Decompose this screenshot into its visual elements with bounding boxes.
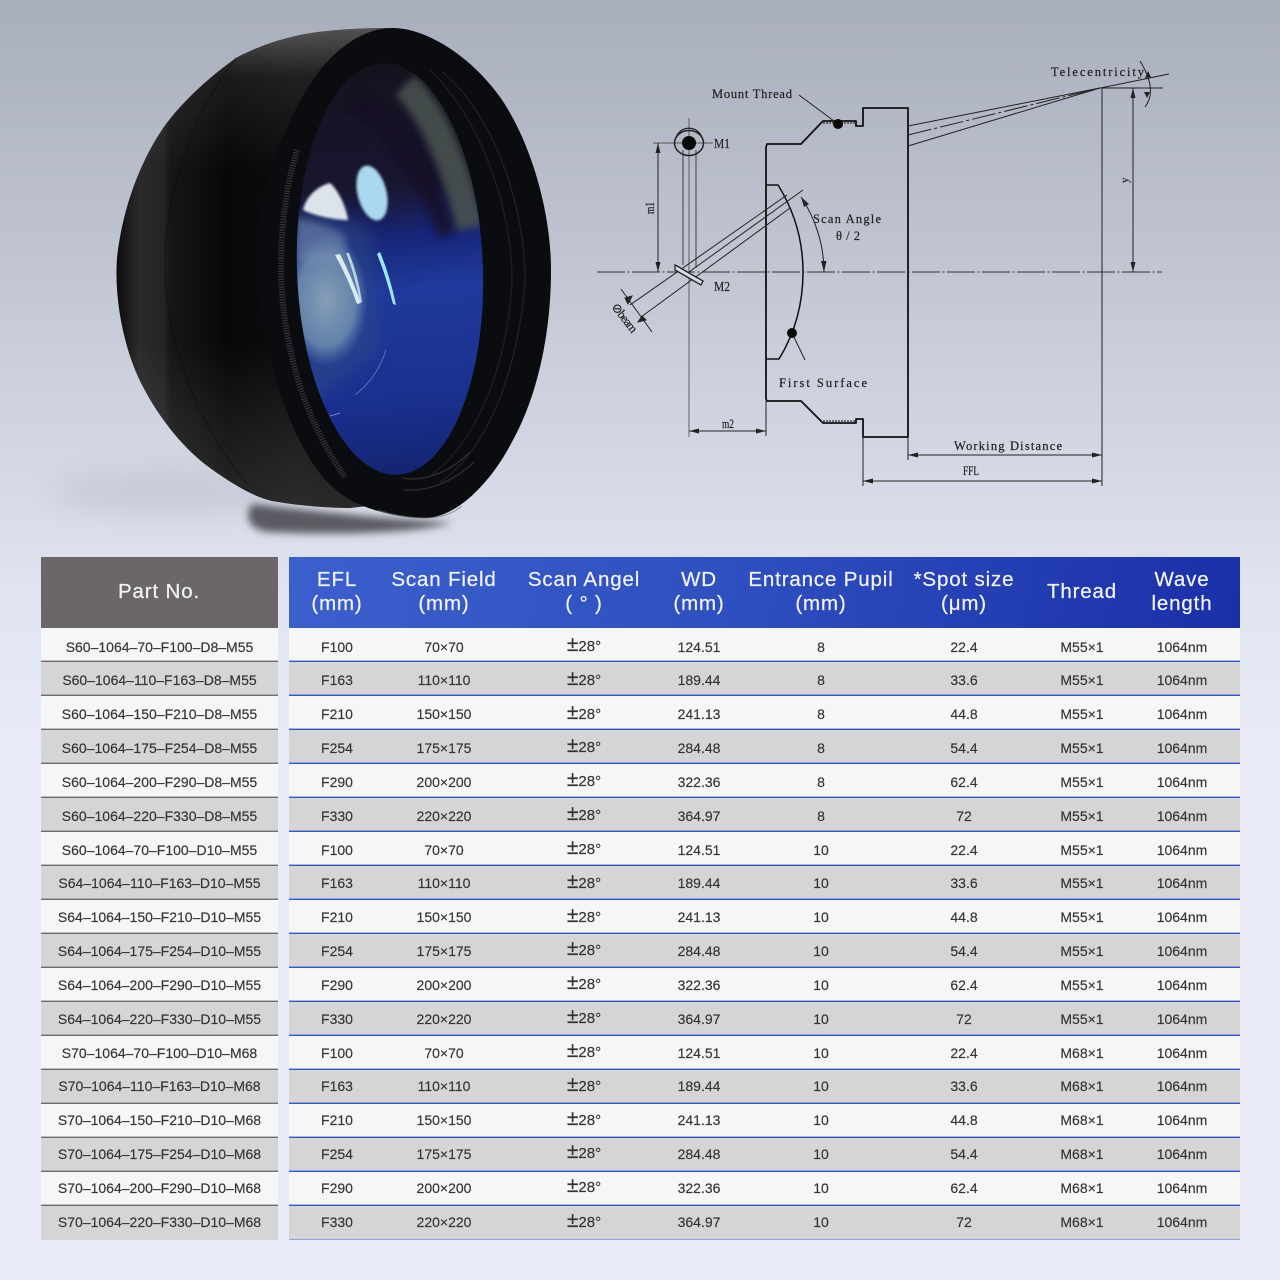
- specifications table: 1064nm: [1157, 1180, 1207, 1196]
- part number column: S60–1064–220–F330–D8–M55: [62, 808, 257, 824]
- glass reflections: [303, 162, 396, 416]
- specifications table: 72: [956, 1214, 972, 1230]
- specifications table: 322.36: [678, 1180, 720, 1196]
- specifications table: 62.4: [950, 1180, 978, 1196]
- specifications table: 189.44: [678, 672, 720, 688]
- diagram labels: m1: [642, 202, 657, 214]
- specifications table: 124.51: [678, 1045, 720, 1061]
- table header: specifications: (mm): [418, 592, 470, 615]
- specifications table: 284.48: [678, 1146, 720, 1162]
- part number column: S70–1064–70–F100–D10–M68: [62, 1045, 257, 1061]
- specifications table: F210: [321, 706, 353, 722]
- specifications table: ±28°: [567, 633, 601, 656]
- specifications table: 220×220: [417, 1214, 471, 1230]
- specifications table: 150×150: [417, 1112, 471, 1128]
- specifications table: 10: [813, 977, 829, 993]
- first surface curve: [766, 185, 803, 359]
- specifications table: M68×1: [1060, 1078, 1104, 1094]
- specifications table: 22.4: [950, 842, 978, 858]
- specifications table: ±28°: [567, 1140, 601, 1163]
- specifications table: 1064nm: [1157, 639, 1207, 655]
- specifications table: 241.13: [678, 1112, 720, 1128]
- specifications table: 10: [813, 1146, 829, 1162]
- specifications table: M55×1: [1060, 774, 1104, 790]
- scan angle arc: [801, 197, 824, 272]
- specifications table: 124.51: [678, 639, 720, 655]
- specifications table: 1064nm: [1157, 706, 1207, 722]
- specifications table: F290: [321, 977, 353, 993]
- lens shadow: [50, 470, 452, 534]
- specifications table: 1064nm: [1157, 909, 1207, 925]
- specifications table: 8: [817, 808, 825, 824]
- specifications table: F290: [321, 774, 353, 790]
- specifications table: 33.6: [950, 875, 978, 891]
- specifications table: ±28°: [567, 1005, 601, 1028]
- specifications table: M55×1: [1060, 672, 1104, 688]
- table header: specifications: Scan Field: [391, 568, 497, 591]
- front retaining ring: [255, 28, 551, 518]
- specifications table: 33.6: [950, 1078, 978, 1094]
- specifications table: 364.97: [678, 808, 720, 824]
- specifications table: 220×220: [417, 1011, 471, 1027]
- specifications table: 189.44: [678, 875, 720, 891]
- specifications table: 1064nm: [1157, 875, 1207, 891]
- specifications table: 364.97: [678, 1214, 720, 1230]
- specifications table: ±28°: [567, 1039, 601, 1062]
- diagram labels: FFL: [963, 463, 979, 478]
- specifications table: F330: [321, 1214, 353, 1230]
- specifications table: ±28°: [567, 937, 601, 960]
- specifications table: 8: [817, 740, 825, 756]
- specifications table: 72: [956, 808, 972, 824]
- specifications table: 10: [813, 1011, 829, 1027]
- specifications table: 70×70: [424, 1045, 464, 1061]
- specifications table: 322.36: [678, 774, 720, 790]
- part number column: S60–1064–70–F100–D8–M55: [66, 639, 253, 655]
- specifications table: 322.36: [678, 977, 720, 993]
- specifications table: 10: [813, 842, 829, 858]
- table header: specifications: WD: [681, 568, 717, 591]
- specifications table: 22.4: [950, 1045, 978, 1061]
- specifications table: 284.48: [678, 943, 720, 959]
- specifications table: F100: [321, 639, 353, 655]
- specifications table: 175×175: [417, 943, 471, 959]
- specifications table: 110×110: [418, 875, 470, 891]
- lens body: [116, 28, 392, 508]
- specifications table: [289, 628, 1240, 1240]
- table header: part number: Part No.: [118, 580, 200, 603]
- part number column: S64–1064–175–F254–D10–M55: [58, 943, 261, 959]
- part number column: S70–1064–150–F210–D10–M68: [58, 1112, 261, 1128]
- specifications table: M68×1: [1060, 1112, 1104, 1128]
- specifications table: 8: [817, 672, 825, 688]
- specifications table: 220×220: [417, 808, 471, 824]
- specifications table: 150×150: [417, 706, 471, 722]
- table header: specifications: EFL: [317, 568, 357, 591]
- specifications table: M68×1: [1060, 1180, 1104, 1196]
- specifications table: M55×1: [1060, 639, 1104, 655]
- specifications table: 110×110: [418, 1078, 470, 1094]
- specifications table: F210: [321, 1112, 353, 1128]
- specifications table: F330: [321, 808, 353, 824]
- specifications table: 1064nm: [1157, 774, 1207, 790]
- specifications table: 175×175: [417, 1146, 471, 1162]
- specifications table: 54.4: [950, 1146, 978, 1162]
- blue coated glass: [296, 63, 484, 475]
- specifications table: F163: [321, 672, 353, 688]
- diagram labels: [609, 65, 1145, 478]
- part number column: S60–1064–70–F100–D10–M55: [62, 842, 257, 858]
- part number column: S60–1064–110–F163–D8–M55: [62, 672, 257, 688]
- specifications table: M55×1: [1060, 977, 1104, 993]
- part number column: S60–1064–200–F290–D8–M55: [62, 774, 257, 790]
- specifications table: F254: [321, 740, 353, 756]
- part number column: S70–1064–110–F163–D10–M68: [58, 1078, 261, 1094]
- specifications table: ±28°: [567, 768, 601, 791]
- table header: part number: [41, 557, 278, 628]
- table header: specifications: [289, 557, 1240, 628]
- specifications table: 22.4: [950, 639, 978, 655]
- specifications table: M55×1: [1060, 875, 1104, 891]
- part number column: S64–1064–200–F290–D10–M55: [58, 977, 261, 993]
- dimension lines: [656, 88, 1136, 486]
- table header: specifications: Scan Angel: [528, 568, 640, 591]
- table header: specifications: Entrance Pupil: [748, 568, 894, 591]
- specifications table: 8: [817, 639, 825, 655]
- part number column: S60–1064–150–F210–D8–M55: [62, 706, 257, 722]
- specifications table: F210: [321, 909, 353, 925]
- specifications table: 10: [813, 875, 829, 891]
- optical axis: [597, 271, 1162, 273]
- table header: specifications: (mm): [795, 592, 847, 615]
- specifications table: 70×70: [424, 842, 464, 858]
- specifications table: F163: [321, 875, 353, 891]
- specifications table: 62.4: [950, 977, 978, 993]
- specifications table: ±28°: [567, 1073, 601, 1096]
- specifications table: 10: [813, 909, 829, 925]
- specifications table: M55×1: [1060, 943, 1104, 959]
- specifications table: 1064nm: [1157, 842, 1207, 858]
- specifications table: 44.8: [950, 1112, 978, 1128]
- first surface callout: First Surface: [779, 376, 867, 390]
- specifications table: M55×1: [1060, 1011, 1104, 1027]
- specifications table: ±28°: [567, 971, 601, 994]
- specifications table: 150×150: [417, 909, 471, 925]
- specifications table: 10: [813, 1214, 829, 1230]
- specifications table: 54.4: [950, 943, 978, 959]
- diagram labels: θ/2: [836, 229, 860, 243]
- diagram labels: Scan Angle: [813, 212, 881, 226]
- specifications table: 10: [813, 1180, 829, 1196]
- product photo: scan lens: [66, 28, 551, 540]
- specifications table: 1064nm: [1157, 943, 1207, 959]
- specifications table: ±28°: [567, 1209, 601, 1232]
- specifications table: F254: [321, 1146, 353, 1162]
- specifications table: 1064nm: [1157, 740, 1207, 756]
- specifications table: 200×200: [417, 774, 471, 790]
- specifications table: 10: [813, 1045, 829, 1061]
- specifications table: ±28°: [567, 904, 601, 927]
- diagram labels: M2: [714, 280, 730, 295]
- mount thread callout: Mount Thread: [712, 87, 793, 101]
- specifications table: F254: [321, 943, 353, 959]
- mount thread callout: [712, 87, 843, 129]
- diagram labels: Telecentricity: [1051, 65, 1145, 79]
- table header: specifications: Thread: [1047, 580, 1117, 603]
- specifications table: M55×1: [1060, 842, 1104, 858]
- specifications table: 175×175: [417, 740, 471, 756]
- specifications table: 110×110: [418, 672, 470, 688]
- specifications table: 44.8: [950, 909, 978, 925]
- first surface callout: [779, 328, 867, 390]
- diagram labels: M1: [714, 137, 730, 152]
- specifications table: M55×1: [1060, 740, 1104, 756]
- specifications table: 1064nm: [1157, 977, 1207, 993]
- part number column: S60–1064–175–F254–D8–M55: [62, 740, 257, 756]
- specifications table: F100: [321, 842, 353, 858]
- specifications table: F100: [321, 1045, 353, 1061]
- specifications table: 200×200: [417, 1180, 471, 1196]
- specifications table: ±28°: [567, 1174, 601, 1197]
- specifications table: F290: [321, 1180, 353, 1196]
- diagram labels: y: [1119, 177, 1131, 183]
- specifications table: M55×1: [1060, 706, 1104, 722]
- specifications table: ±28°: [567, 1107, 601, 1130]
- specifications table: F330: [321, 1011, 353, 1027]
- mirror M1: [653, 118, 713, 437]
- part number column: S70–1064–220–F330–D10–M68: [58, 1214, 261, 1230]
- specifications table: 1064nm: [1157, 808, 1207, 824]
- table header: specifications: length: [1152, 592, 1212, 615]
- table header: specifications: (mm): [673, 592, 725, 615]
- specifications table: 189.44: [678, 1078, 720, 1094]
- specifications table: 1064nm: [1157, 1112, 1207, 1128]
- specifications table: ±28°: [567, 836, 601, 859]
- specifications table: 10: [813, 1078, 829, 1094]
- lens housing outline: [766, 108, 908, 437]
- specifications table: 1064nm: [1157, 1146, 1207, 1162]
- specifications table: 10: [813, 943, 829, 959]
- mirror M2 and beam: [621, 190, 803, 332]
- table header: specifications: *Spot size: [914, 568, 1014, 591]
- specifications table: 241.13: [678, 706, 720, 722]
- table header: specifications: (μm): [941, 592, 987, 615]
- specifications table: 1064nm: [1157, 672, 1207, 688]
- specifications table: 284.48: [678, 740, 720, 756]
- table header: specifications: (mm): [311, 592, 363, 615]
- part number column: S70–1064–175–F254–D10–M68: [58, 1146, 261, 1162]
- specifications table: 8: [817, 706, 825, 722]
- specifications table: ±28°: [567, 667, 601, 690]
- part number column: [41, 628, 278, 1240]
- specifications table: M55×1: [1060, 909, 1104, 925]
- part number column: S64–1064–110–F163–D10–M55: [58, 875, 261, 891]
- specifications table: 1064nm: [1157, 1214, 1207, 1230]
- specifications table: 364.97: [678, 1011, 720, 1027]
- specifications table: 54.4: [950, 740, 978, 756]
- specifications table: 8: [817, 774, 825, 790]
- part number column: S70–1064–200–F290–D10–M68: [58, 1180, 261, 1196]
- specifications table: 241.13: [678, 909, 720, 925]
- specifications table: M68×1: [1060, 1146, 1104, 1162]
- specifications table: 1064nm: [1157, 1011, 1207, 1027]
- specifications table: ±28°: [567, 701, 601, 724]
- part number column: S64–1064–150–F210–D10–M55: [58, 909, 261, 925]
- diagram labels: m2: [722, 416, 734, 431]
- diagram labels: ⊘beam: [609, 300, 641, 336]
- specifications table: M68×1: [1060, 1214, 1104, 1230]
- specifications table: 62.4: [950, 774, 978, 790]
- specifications table: 1064nm: [1157, 1045, 1207, 1061]
- specifications table: 200×200: [417, 977, 471, 993]
- specifications table: F163: [321, 1078, 353, 1094]
- specifications table: ±28°: [567, 870, 601, 893]
- specifications table: 33.6: [950, 672, 978, 688]
- part number column: S64–1064–220–F330–D10–M55: [58, 1011, 261, 1027]
- specifications table: M68×1: [1060, 1045, 1104, 1061]
- focal rays and telecentricity: [908, 61, 1169, 146]
- diagram labels: Working Distance: [954, 439, 1062, 453]
- specifications table: 72: [956, 1011, 972, 1027]
- table header: specifications: Wave: [1154, 568, 1210, 591]
- specifications table: 10: [813, 1112, 829, 1128]
- specifications table: 70×70: [424, 639, 464, 655]
- specifications table: ±28°: [567, 734, 601, 757]
- specifications table: 44.8: [950, 706, 978, 722]
- table header: specifications: ( ° ): [565, 592, 603, 615]
- specifications table: 124.51: [678, 842, 720, 858]
- technical diagram: [597, 60, 1170, 486]
- specifications table: 1064nm: [1157, 1078, 1207, 1094]
- specifications table: ±28°: [567, 802, 601, 825]
- specifications table: M55×1: [1060, 808, 1104, 824]
